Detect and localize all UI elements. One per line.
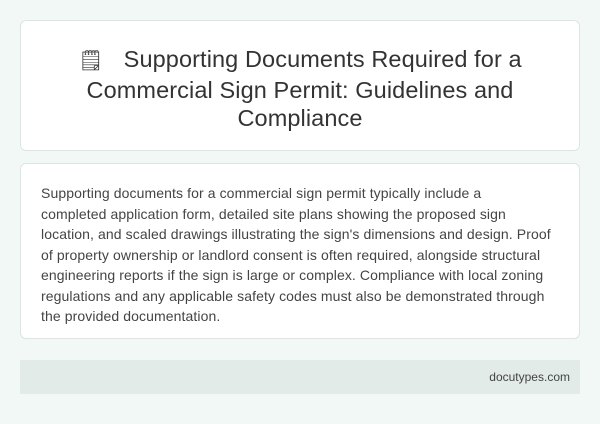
title panel: [20, 20, 580, 151]
description text: regulations and any applicable safety codes must also be demonstrated through: [41, 288, 544, 304]
description panel: [20, 163, 580, 339]
description text: [41, 185, 551, 324]
footer text: docutypes.com: [489, 370, 570, 384]
title: 🗒 Supporting Documents Required for a Commercial Sign Permit: Guidelines and Compliance: [78, 46, 522, 131]
description text: engineering reports if the sign is large or complex. Compliance with local zoning: [41, 267, 543, 283]
footer bar: [20, 360, 580, 394]
description text: of property ownership or landlord consent is often required, alongside structural: [41, 246, 540, 262]
description text: completed application form, detailed site plans showing the proposed sign: [41, 206, 506, 222]
description text: Supporting documents for a commercial sign permit typically include a: [41, 185, 481, 201]
description text: location, and scaled drawings illustrating the sign's dimensions and design. Proof: [41, 226, 551, 242]
description text: the provided documentation.: [41, 308, 220, 324]
